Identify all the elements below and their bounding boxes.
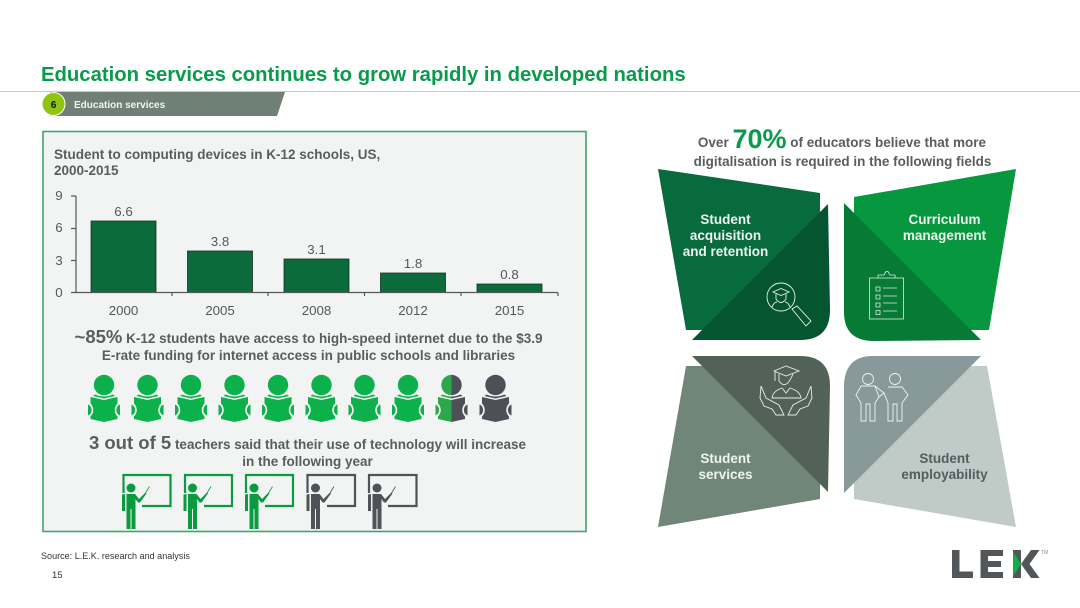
icon: graduate in hands — [760, 366, 812, 415]
source note: Source: L.E.K. research and analysis — [41, 551, 190, 561]
right heading — [694, 124, 991, 169]
icon: two people — [856, 374, 908, 421]
chart heading: Student to computing devices in K-12 schools, US, — [54, 147, 380, 162]
panel: student employability: employability — [901, 467, 988, 482]
page number: 15 — [52, 570, 63, 581]
logo: LEK: TM — [1041, 550, 1048, 556]
bar chart: 0.8 — [500, 267, 519, 282]
callout: internet access: ~85% K-12 students have access to high-speed internet due to the $3.9 — [75, 326, 542, 347]
right heading: Over — [698, 135, 729, 150]
bar chart: 3 — [55, 253, 63, 268]
panel: student employability: Student — [919, 451, 970, 466]
callout: teachers: 3 out of 5 teachers said that their use of technology will increase — [89, 432, 527, 453]
panel: curriculum management: Curriculum — [908, 212, 981, 227]
title: Education services continues to grow rapidly in developed nations — [41, 64, 686, 86]
bar chart: 2008 — [302, 303, 331, 318]
bar chart: 3.1 — [307, 242, 326, 257]
bar chart — [55, 188, 558, 318]
callout: internet access: E-rate funding for internet access in public schools and libraries — [102, 348, 515, 363]
panel: left data panel — [43, 132, 586, 532]
section tab — [42, 92, 285, 116]
panel: student acquisition and retention — [658, 169, 830, 340]
panel: student acquisition and retention: Student — [700, 212, 751, 227]
section tab: Education services — [74, 100, 166, 111]
icon: magnifier with student — [767, 283, 811, 326]
right heading: digitalisation is required in the following fields — [694, 154, 991, 169]
panel: curriculum management: management — [903, 228, 987, 243]
callout: internet access — [75, 326, 542, 363]
right heading: of educators believe that more — [787, 135, 987, 150]
bar chart: 1.8 — [404, 256, 422, 271]
bar chart: 2012 — [398, 303, 428, 318]
bar chart: 2015 — [495, 303, 524, 318]
bar chart: 2005 — [205, 303, 235, 318]
bar chart: 6 — [55, 220, 63, 235]
bar chart: 6.6 — [114, 204, 133, 219]
icons: teachers at boards — [122, 475, 416, 529]
panel: student acquisition and retention: and retention — [683, 244, 768, 259]
panel: student services — [658, 356, 830, 527]
bar chart: 2000 — [109, 303, 138, 318]
section tab: 6 — [51, 100, 57, 111]
callout: teachers — [89, 432, 527, 469]
right heading: 70% — [732, 124, 787, 154]
panel: student services: services — [698, 467, 753, 482]
bar chart: 3.8 — [211, 234, 229, 249]
icons: students reading — [88, 375, 512, 422]
bar chart: 0 — [55, 285, 63, 300]
bar chart: 9 — [55, 188, 63, 203]
chart heading: 2000-2015 — [54, 163, 119, 178]
logo: LEK — [952, 550, 1048, 578]
icon: clipboard checklist — [870, 272, 904, 319]
panel: student services: Student — [700, 451, 751, 466]
panel: curriculum management — [844, 169, 1016, 341]
panel: student acquisition and retention: acquisition — [690, 228, 761, 243]
panel: student employability — [844, 356, 1016, 527]
callout: teachers: in the following year — [242, 454, 373, 469]
